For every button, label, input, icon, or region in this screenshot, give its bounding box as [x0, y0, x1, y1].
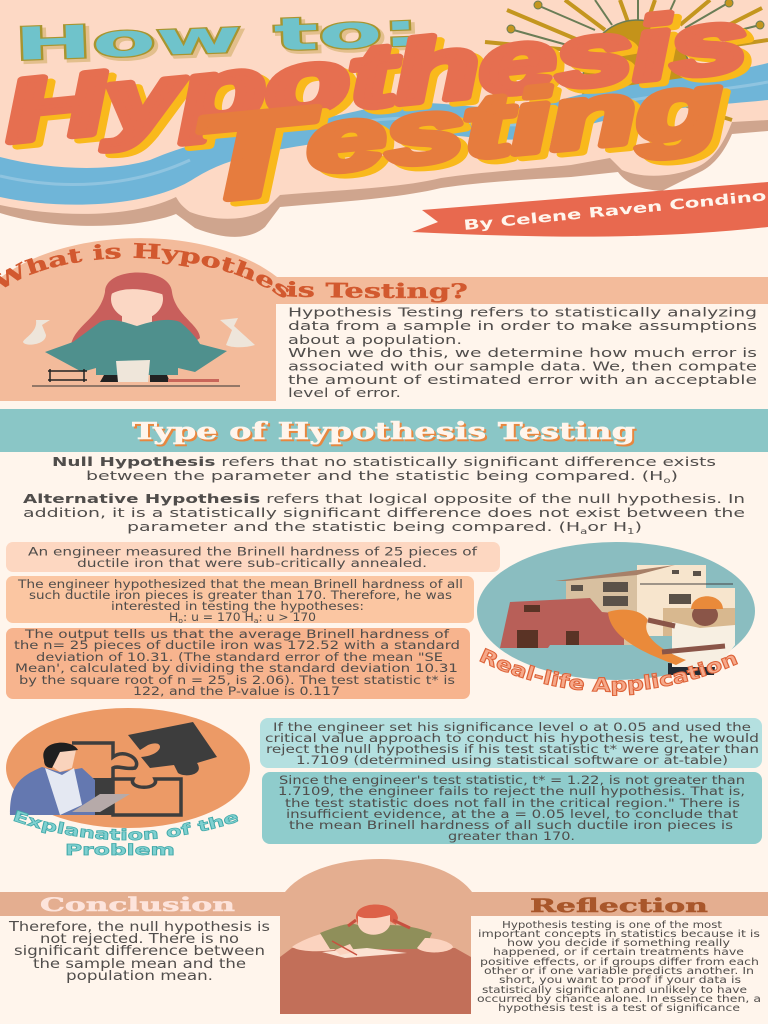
- text block: definition: [288, 304, 757, 400]
- callout: hypotheses: The engineer hypothesized that the mean Brinell hardness of all: [17, 578, 463, 591]
- band: conclusion and reflection with arch: [0, 859, 768, 960]
- text block: reflection: [477, 920, 761, 1014]
- title: Testing: [184, 43, 736, 233]
- callout: critical value approach: critical value approach to conduct his hypothesis test, he would: [265, 732, 759, 745]
- callout: output: deviation of 10.31. (The standard error of the mean "SE: [36, 651, 443, 664]
- title: Testing: T: [184, 82, 328, 228]
- title: Hypothesis: Hypothesis: [8, 0, 759, 165]
- callout: critical value approach: [260, 718, 762, 768]
- callout: output: Mean', calculated by dividing the standard deviation 10.31: [15, 662, 458, 675]
- illustration: scientist with flasks: [23, 272, 255, 386]
- callout: output: by the square root of n = 25, is 2.06). The test statistic t* is: [19, 674, 455, 687]
- text block: null hypothesis: between the parameter and the statistic being compared. (H: [86, 469, 477, 484]
- callout: hypotheses: : u > 170: [258, 611, 316, 624]
- title: Testing: esting: [302, 54, 726, 192]
- title: Hypothesis: [0, 0, 759, 166]
- text block: alternative hypothesis: or H: [587, 520, 627, 535]
- callout: fail to reject: Since the engineer's test statistic, t* = 1.22, is not greater than: [279, 774, 745, 787]
- river brush stroke: [0, 63, 768, 205]
- callout: engineer measurement: [6, 542, 500, 572]
- text block: reflection: short, you want to proof if your data is: [499, 975, 741, 986]
- header background: [0, 0, 768, 237]
- title: Testing: T: [191, 86, 335, 232]
- callout: hypotheses: interested in testing the hypotheses:: [111, 600, 364, 613]
- text block: alternative hypothesis: parameter and the statistic being compared. (H: [127, 520, 433, 535]
- callout: hypotheses: a: [254, 617, 258, 625]
- title: How to: [13, 3, 423, 74]
- banner: type of hypothesis testing: Type of Hypothesis Testing: [134, 420, 637, 447]
- callout: fail to reject: greater than 170.: [448, 830, 575, 843]
- heading: conclusion: Conclusion: [40, 894, 235, 916]
- text block: alternative hypothesis: 1: [627, 527, 635, 536]
- text block: conclusion: significant difference between: [14, 944, 265, 959]
- heading: what is hypothesis testing: What is Hypothesis Testing?: [0, 242, 467, 303]
- callout: output: The output tells us that the average Brinell hardness of: [24, 628, 450, 641]
- illustration: explanation of the problem: [6, 708, 250, 828]
- text block: null hypothesis: [52, 455, 716, 485]
- panel: what is hypothesis testing: [0, 238, 768, 401]
- callout: fail to reject: insufficient evidence, at the a = 0.05 level, to conclude that: [286, 808, 739, 821]
- text block: reflection: other or if one variable predicts another. In: [484, 966, 754, 977]
- callout: engineer measurement: An engineer measured the Brinell hardness of 25 pieces of: [28, 546, 478, 558]
- text block: reflection: important concepts in statistics because it is: [478, 929, 760, 940]
- callout: critical value approach: If the engineer set his significance level o at 0.05 and used the: [273, 721, 751, 734]
- heading: explanation of the problem: Explanation of the: [13, 810, 238, 840]
- callout: output: the n= 25 pieces of ductile iron was 172.52 with a standard: [14, 639, 460, 652]
- heading: real-life application: Real-life Application: [479, 648, 738, 696]
- text block: definition: the amount of estimated error with an acceptable: [288, 372, 757, 387]
- text block: alternative hypothesis: a: [580, 527, 588, 536]
- text block: conclusion: [8, 920, 270, 984]
- text block: alternative hypothesis: [23, 492, 745, 536]
- callout: hypotheses: : u = 170 H: [183, 611, 254, 624]
- callout: hypotheses: o: [178, 617, 183, 625]
- text block: alternative hypothesis: addition, it is a statistically significant difference does not exist between the: [23, 506, 745, 521]
- text block: reflection: hypothesis test is a test of significance: [498, 1003, 740, 1014]
- callout: hypotheses: [6, 576, 474, 625]
- callout: fail to reject: 1.7109, the engineer fails to reject the null hypothesis. That is,: [278, 785, 745, 798]
- heading: explanation of the problem: [13, 810, 238, 859]
- text block: definition: about a population.: [288, 332, 462, 347]
- text block: conclusion: not rejected. There is no: [40, 932, 239, 947]
- title: Testing: esting: [309, 58, 734, 196]
- heading: explanation of the problem: Problem: [65, 841, 175, 859]
- callout: critical value approach: 1.7109 (determined using statistical software or at-table): [296, 754, 728, 767]
- text block: conclusion: population mean.: [66, 969, 213, 984]
- callout: fail to reject: the mean Brinell hardness of all such ductile iron pieces is: [289, 819, 733, 832]
- title: How to: How to:: [13, 3, 420, 71]
- text block: definition: Hypothesis Testing refers to statistically analyzing: [288, 304, 757, 320]
- callout: fail to reject: the test statistic does not fall in the critical region." There is: [285, 797, 740, 810]
- text block: definition: data from a sample in order to make assumptions: [288, 318, 757, 333]
- text block: definition: associated with our sample data. We, then compate: [288, 358, 757, 374]
- callout: output: 122, and the P-value is 0.117: [133, 685, 340, 698]
- banner: type of hypothesis testing: [0, 409, 768, 452]
- illustration: student writing: [280, 904, 471, 1014]
- text block: definition: level of error.: [288, 385, 401, 400]
- callout: hypotheses: such ductile iron pieces is greater than 170. Therefore, he was: [29, 589, 452, 602]
- author ribbon: [412, 182, 768, 237]
- text block: conclusion: the sample mean and the: [33, 957, 246, 972]
- text block: reflection: occurred by chance alone. In essence then, a: [477, 994, 761, 1005]
- text block: null hypothesis: Null Hypothesis refers that no statistically significant difference exists: [52, 455, 716, 470]
- banner: type of hypothesis testing: Type of Hypothesis Testing: [132, 418, 635, 445]
- text block: reflection: Hypothesis testing is one of the most: [502, 920, 722, 931]
- callout: engineer measurement: ductile iron that were sub-critically annealed.: [77, 557, 427, 570]
- text block: alternative hypothesis: Alternative Hypothesis refers that logical opposite of the null hypothesis. In: [23, 492, 745, 507]
- callout: critical value approach: reject the null hypothesis if his test statistic t* were greater than: [266, 743, 759, 756]
- heading: reflection: Reflection: [530, 895, 708, 917]
- text block: reflection: happened, or if certain treatments have: [493, 947, 744, 958]
- illustration: real-life application: [477, 542, 755, 680]
- text block: definition: When we do this, we determine how much error is: [288, 345, 757, 360]
- text block: reflection: positive effects, or if groups differ from each: [480, 957, 759, 968]
- title: Hypothesis: Hypothesis: [0, 0, 751, 161]
- text block: reflection: statistically significant and unlikely to have: [482, 985, 747, 996]
- text block: conclusion: Therefore, the null hypothesis is: [8, 920, 270, 935]
- text block: null hypothesis: o: [663, 476, 671, 485]
- title: How to: How to:: [17, 6, 423, 74]
- callout: fail to reject: [262, 772, 762, 844]
- callout: output: [6, 628, 470, 699]
- callout: hypotheses: H: [169, 611, 177, 624]
- text block: reflection: how you decide if something really: [507, 938, 730, 949]
- text block: null hypothesis: ): [671, 469, 678, 484]
- text block: alternative hypothesis: ): [635, 520, 642, 535]
- author ribbon: By Celene Raven Condino: [463, 188, 768, 234]
- icon: sun: [485, 0, 768, 120]
